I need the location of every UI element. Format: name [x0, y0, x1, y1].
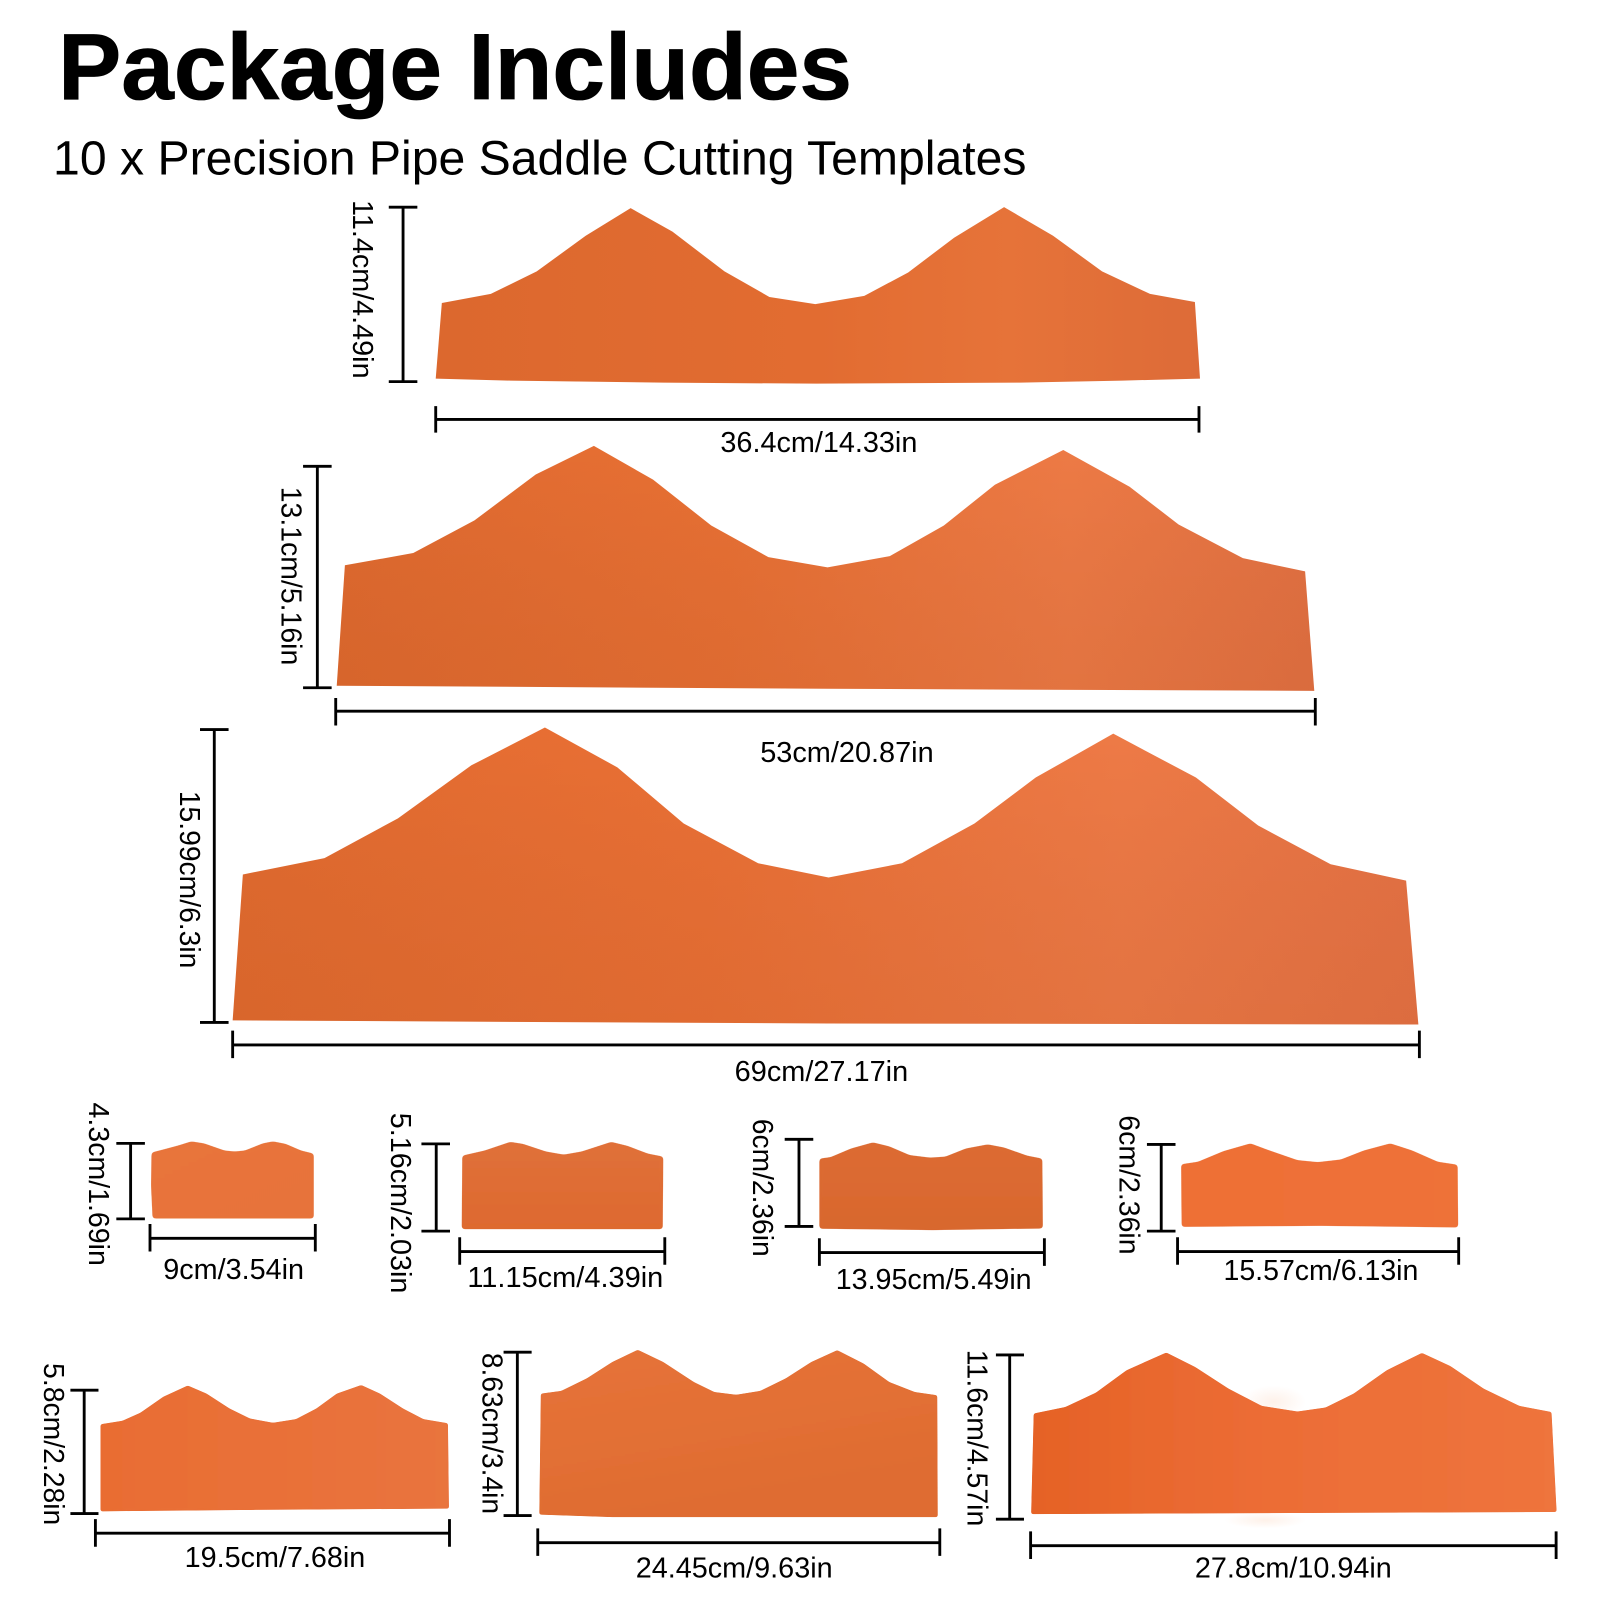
height label: 6cm/2.36in	[746, 1119, 778, 1257]
height label: 15.99cm/6.3in	[173, 791, 205, 968]
height bracket	[1147, 1144, 1176, 1231]
template shape	[337, 446, 1314, 691]
width bracket	[1178, 1237, 1459, 1265]
height label: 8.63cm/3.4in	[476, 1353, 508, 1514]
width bracket	[95, 1519, 449, 1547]
template 7: 15.57cm wide	[1112, 1115, 1459, 1287]
height label: 6cm/2.36in	[1112, 1115, 1144, 1255]
width label: 9cm/3.54in	[163, 1254, 304, 1286]
width bracket	[436, 406, 1199, 433]
template 4: 9cm wide	[82, 1103, 315, 1286]
width label: 15.57cm/6.13in	[1223, 1255, 1418, 1287]
template 6: 13.95cm wide	[746, 1119, 1044, 1296]
title: Package Includes	[58, 14, 852, 119]
width bracket	[233, 1031, 1419, 1058]
width bracket	[336, 698, 1315, 726]
width bracket	[819, 1238, 1044, 1266]
template 5: 11.15cm wide	[384, 1113, 665, 1294]
height bracket	[200, 730, 229, 1022]
height bracket	[116, 1143, 145, 1219]
width label: 13.95cm/5.49in	[836, 1264, 1032, 1296]
template shape	[539, 1350, 938, 1517]
template 3: 69cm wide	[173, 728, 1419, 1088]
width label: 24.45cm/9.63in	[636, 1552, 833, 1584]
width label: 36.4cm/14.33in	[720, 427, 917, 459]
template shape	[462, 1142, 663, 1229]
template 9: 24.45cm wide	[476, 1350, 940, 1584]
template shape	[233, 728, 1418, 1024]
width bracket	[1031, 1531, 1556, 1559]
height label: 11.6cm/4.57in	[960, 1350, 992, 1526]
height label: 5.16cm/2.03in	[384, 1113, 416, 1293]
width bracket	[460, 1237, 665, 1265]
width label: 19.5cm/7.68in	[185, 1542, 365, 1574]
template shape	[436, 207, 1200, 384]
template shape	[1031, 1352, 1557, 1528]
height label: 5.8cm/2.28in	[37, 1363, 69, 1525]
height bracket	[785, 1139, 813, 1226]
width bracket	[150, 1224, 315, 1252]
width label: 53cm/20.87in	[760, 737, 934, 769]
height bracket	[996, 1355, 1024, 1519]
template shape	[151, 1141, 314, 1218]
height label: 11.4cm/4.49in	[346, 200, 378, 379]
width label: 11.15cm/4.39in	[467, 1262, 663, 1294]
template 10: 27.8cm wide	[960, 1350, 1557, 1584]
template 1: 36.4cm wide	[346, 200, 1200, 459]
height bracket	[303, 466, 332, 688]
width label: 27.8cm/10.94in	[1195, 1552, 1392, 1584]
height bracket	[421, 1144, 450, 1231]
template shape	[101, 1385, 449, 1511]
template shape	[1181, 1143, 1458, 1227]
subtitle: 10 x Precision Pipe Saddle Cutting Templates	[53, 132, 1027, 185]
height bracket	[389, 207, 417, 382]
width label: 69cm/27.17in	[735, 1056, 908, 1088]
height bracket	[504, 1352, 532, 1516]
height bracket	[70, 1390, 98, 1514]
template 2: 53cm wide	[275, 446, 1315, 769]
height label: 4.3cm/1.69in	[82, 1103, 114, 1266]
template 8: 19.5cm wide	[37, 1363, 449, 1574]
height label: 13.1cm/5.16in	[275, 487, 307, 665]
width bracket	[538, 1528, 940, 1556]
template shape	[819, 1142, 1043, 1230]
